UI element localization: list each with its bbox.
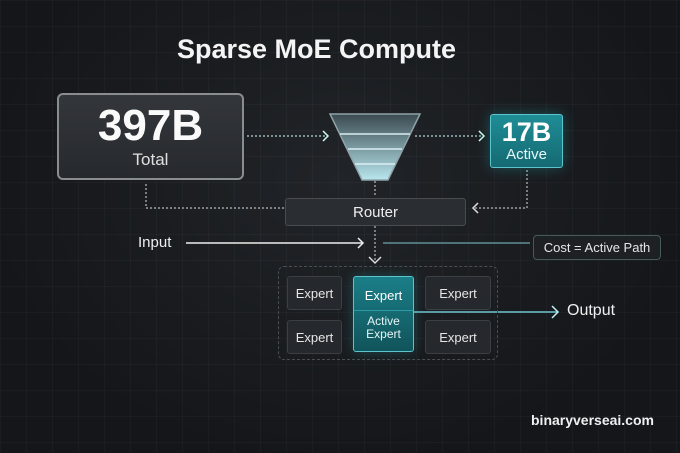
label: output: Output: [567, 302, 615, 319]
panel: 397B total: 397B: [98, 100, 203, 150]
active expert: Expert: [366, 326, 401, 340]
expert: [287, 276, 342, 310]
expert: Expert: [439, 286, 477, 300]
label: input: Input: [138, 234, 171, 251]
panel: experts: [278, 266, 498, 360]
footer: binaryverseai.com: [531, 412, 654, 428]
active expert: Active: [367, 314, 400, 328]
panel: 397B total: Total: [133, 150, 168, 168]
router: Router: [353, 204, 398, 220]
router: [285, 198, 466, 226]
icon: funnel: [328, 113, 422, 181]
expert: [425, 276, 491, 310]
title: Sparse MoE Compute: [177, 34, 456, 64]
active expert: Expert: [365, 288, 402, 302]
panel: 17B active: [490, 114, 563, 168]
expert: [425, 320, 491, 354]
callout: cost: [533, 235, 661, 260]
expert: Expert: [296, 286, 333, 300]
panel: 397B total: [57, 93, 244, 180]
expert: Expert: [439, 330, 477, 344]
callout: cost: Cost = Active Path: [544, 240, 650, 255]
expert: [287, 320, 342, 354]
active expert: [353, 276, 414, 352]
expert: Expert: [296, 330, 333, 344]
panel: 17B active: 17B: [502, 117, 551, 147]
panel: 17B active: Active: [506, 146, 547, 163]
